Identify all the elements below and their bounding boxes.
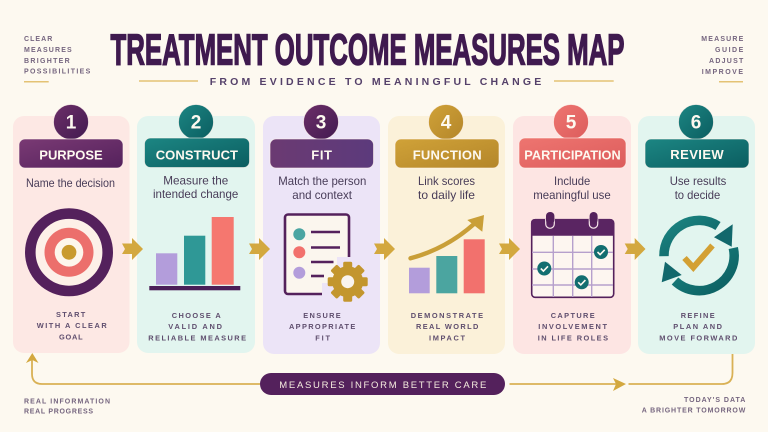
- step number 6: 6: [691, 112, 701, 134]
- step number 4: 4: [441, 112, 452, 134]
- step number 5: [554, 104, 588, 140]
- left side note: POSSIBILITIES: [24, 69, 91, 76]
- description: [533, 174, 611, 202]
- chart: bars with rising arrow: [409, 215, 485, 293]
- caption: [148, 311, 246, 342]
- left side note: CLEAR: [24, 36, 52, 43]
- heading: fit: [270, 139, 374, 168]
- right side note: IMPROVE: [702, 69, 743, 76]
- step number 2: [178, 104, 214, 140]
- step number 1: [54, 104, 88, 140]
- caption: [659, 311, 738, 342]
- arrow: step 5 to 6: [625, 238, 646, 260]
- heading: construct: CONSTRUCT: [156, 147, 238, 162]
- caption: REFINE: [681, 311, 715, 320]
- step number 5: 5: [566, 112, 577, 134]
- arrow: step 2 to 3: [249, 238, 270, 260]
- description: [418, 174, 475, 202]
- right side note: ADJUST: [709, 58, 744, 65]
- caption: [37, 310, 107, 341]
- chart: rising bars: [149, 217, 240, 290]
- footer note right: A BRIGHTER TOMORROW: [642, 408, 746, 414]
- heading: purpose: PURPOSE: [39, 147, 103, 162]
- description: Link scores: [418, 174, 475, 188]
- banner: measures inform better care: [260, 373, 505, 395]
- caption: GOAL: [59, 332, 83, 341]
- footer note left: REAL PROGRESS: [24, 408, 93, 416]
- description: meaningful use: [533, 188, 611, 202]
- caption: [538, 311, 608, 342]
- step number 4: [428, 104, 464, 140]
- right side note: [701, 36, 744, 82]
- description: Name the decision: [26, 176, 115, 190]
- description: Use results: [670, 174, 726, 188]
- description: to decide: [675, 188, 721, 202]
- panel 1: purpose: [13, 104, 130, 353]
- heading: construct: [144, 138, 250, 168]
- panel 3: fit: [263, 104, 380, 354]
- heading: purpose: [19, 139, 123, 168]
- caption: MOVE FORWARD: [659, 333, 738, 342]
- step number 2: 2: [191, 112, 201, 134]
- footer note left: REAL INFORMATION: [24, 398, 110, 406]
- panel 4: function: [388, 104, 505, 354]
- left side note: BRIGHTER: [24, 58, 70, 65]
- caption: [289, 311, 355, 342]
- caption: CAPTURE: [551, 311, 595, 320]
- description: Include: [554, 174, 591, 188]
- step number 6: [678, 104, 714, 140]
- panel 5: participation: [513, 104, 631, 354]
- heading: participation: [519, 138, 626, 168]
- caption: WITH A CLEAR: [37, 321, 107, 330]
- caption: PLAN AND: [673, 322, 723, 331]
- description: [153, 174, 239, 201]
- icon: target: [30, 214, 108, 291]
- left side note: [24, 36, 91, 82]
- subtitle: FROM EVIDENCE TO MEANINGFUL CHANGE: [210, 76, 541, 88]
- forward arrow: toward review: [510, 354, 732, 391]
- caption: IMPACT: [429, 333, 465, 342]
- arrow: step 3 to 4: [374, 238, 395, 260]
- banner: measures inform better care: MEASURES INFORM BETTER CARE: [279, 380, 486, 391]
- right side note: GUIDE: [715, 47, 744, 54]
- icon: calendar with checks: [531, 212, 614, 297]
- caption: ENSURE: [303, 311, 341, 320]
- left side note: MEASURES: [24, 47, 72, 54]
- caption: FIT: [315, 333, 330, 342]
- caption: START: [56, 310, 86, 319]
- footer note left: [24, 398, 110, 416]
- caption: CHOOSE A: [172, 311, 221, 320]
- panel 2: construct: [137, 104, 255, 353]
- caption: INVOLVEMENT: [538, 322, 607, 331]
- heading: review: REVIEW: [670, 147, 724, 162]
- step number 3: [304, 104, 338, 140]
- caption: RELIABLE MEASURE: [148, 333, 246, 342]
- arrow: step 4 to 5: [499, 238, 520, 260]
- icon: checklist with gear: [285, 214, 368, 302]
- heading: fit: FIT: [311, 147, 332, 162]
- description: and context: [292, 188, 353, 202]
- heading: function: FUNCTION: [413, 147, 482, 162]
- panel 6: review: [638, 104, 755, 354]
- caption: IN LIFE ROLES: [538, 333, 608, 342]
- icon: review cycle with check: [662, 220, 734, 291]
- arrow: step 1 to 2: [122, 238, 143, 260]
- feedback arrow: back to start: [26, 353, 260, 384]
- footer note right: [642, 397, 746, 414]
- description: to daily life: [418, 188, 475, 202]
- description: Match the person: [278, 174, 366, 188]
- description: Measure the: [163, 174, 229, 188]
- caption: APPROPRIATE: [289, 322, 355, 331]
- description: [278, 174, 366, 202]
- heading: function: [395, 139, 499, 168]
- step number 1: 1: [66, 112, 77, 134]
- caption: DEMONSTRATE: [411, 311, 483, 320]
- step number 3: 3: [316, 112, 326, 134]
- caption: VALID AND: [168, 322, 223, 331]
- right side note: MEASURE: [701, 36, 744, 43]
- caption: [411, 311, 483, 342]
- heading: review: [645, 139, 749, 168]
- caption: REAL WORLD: [416, 322, 479, 331]
- description: [670, 174, 726, 202]
- description: intended change: [153, 187, 239, 201]
- heading: participation: PARTICIPATION: [524, 147, 621, 162]
- footer note right: TODAY'S DATA: [684, 397, 745, 404]
